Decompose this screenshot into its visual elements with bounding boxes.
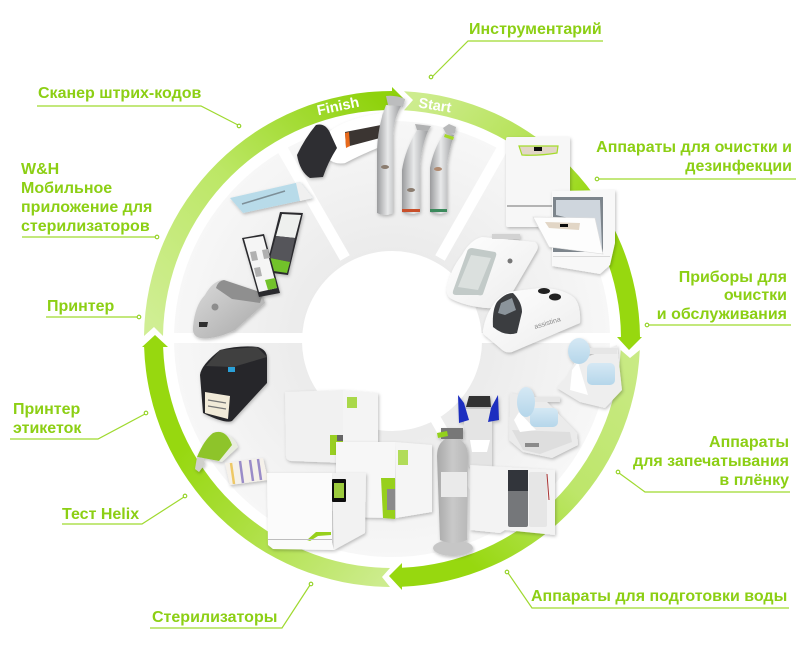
label: water preparation: Аппараты для подготовки воды [531,588,787,605]
label: helix test: Тест Helix [62,506,139,523]
label: barcode scanner [37,85,241,128]
product: cleaning device with window [447,234,538,308]
label: instruments [429,21,603,79]
product: washer-disinfector closed [506,137,570,227]
product: sterilization pouch [230,182,313,213]
label: sealing machines: в плёнку [719,472,789,489]
product: sterilizer front [267,473,366,550]
product: water tank [433,428,473,556]
product: sealing machine rear [557,338,622,408]
product: filtration box [470,465,555,535]
label: sealing machines [616,434,790,492]
label: printer: Принтер [47,298,115,315]
label: sterilizers [150,582,313,628]
product: washer-disinfector open [533,190,615,274]
device wordmark: assistina [534,316,562,331]
product: sterilizer middle [336,442,432,519]
label: label printer: Принтер [13,401,81,418]
label: cleaning devices: Приборы для [679,269,787,286]
label: label printer: этикеток [13,420,82,437]
label: sealing machines: Аппараты [709,434,789,451]
arrow: printer to finish [144,87,405,336]
label: water preparation [505,570,789,608]
label: cleaning devices: и обслуживания [657,306,787,323]
grey sector disk [170,121,615,557]
label: printer [46,298,141,319]
product: mobile printer [193,280,265,338]
phone 1 [242,234,280,297]
label: mobile app [21,161,159,239]
arrow: start to washers [404,91,642,350]
label: Finish: Finish [316,95,361,119]
label: mobile app: приложение для [21,199,152,216]
label: mobile app: стерилизаторов [21,218,150,235]
label: helix test [62,494,187,524]
product: assistina device [483,288,580,352]
product: helix test [195,432,268,485]
label: barcode scanner: Сканер штрих-кодов [38,85,202,102]
label: mobile app: Мобильное [21,180,112,197]
product: barcode scanner [297,113,382,178]
arrow: sealers to water [389,350,640,590]
arrow: sterilizers to printer [142,335,390,587]
product: label printer [200,346,267,422]
label: mobile app: W&H [21,161,59,178]
product: handpieces [377,96,456,215]
label: sterilizers: Стерилизаторы [152,609,277,626]
label: washers [595,139,796,181]
handpiece 1 [377,96,405,215]
label: cleaning devices: очистки [724,287,787,304]
label: instruments: Инструментарий [469,21,602,38]
handpiece 2 [402,124,431,214]
phone 2 [265,212,303,275]
handpiece 3 [430,124,456,214]
product: cartridge with blue bracket [458,395,499,467]
label: cleaning devices [645,269,791,327]
label: Start: Start [417,96,453,116]
label: washers: Аппараты для очистки и [596,139,792,156]
product: sealing machine front [509,387,578,458]
product: phones with app [242,212,303,297]
label: label printer [10,401,148,439]
label: washers: дезинфекции [685,158,792,175]
product: sterilizer back [285,390,378,463]
cycle ring arrows [142,87,642,590]
label: sealing machines: для запечатывания [633,453,789,470]
